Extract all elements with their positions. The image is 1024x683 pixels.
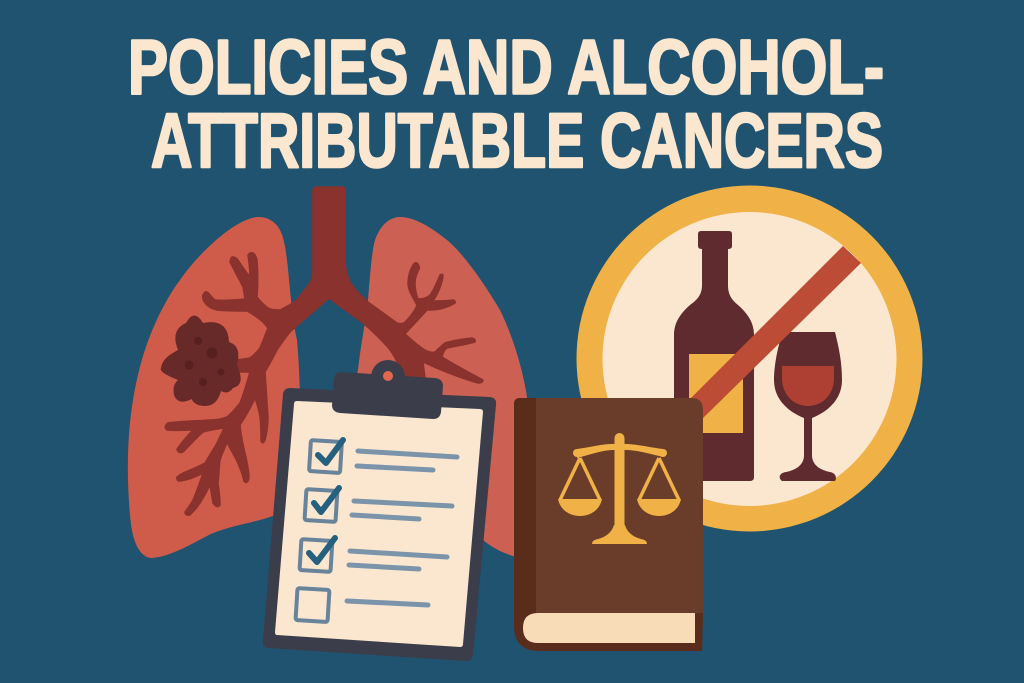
clip	[332, 360, 443, 419]
bronchi	[165, 187, 483, 515]
icon: clipboard checklist	[263, 360, 496, 661]
book cover	[514, 398, 703, 651]
bottle label	[689, 354, 743, 433]
checkbox rows	[296, 440, 342, 622]
icon: lungs	[128, 187, 530, 570]
paper	[275, 401, 483, 647]
icon: law book	[514, 398, 703, 651]
right lung	[340, 217, 530, 570]
clipboard board	[263, 388, 496, 661]
check marks	[309, 440, 343, 562]
icon: scales of justice	[558, 433, 681, 544]
tumor	[161, 316, 241, 406]
wine glass	[774, 332, 842, 481]
book spine	[514, 398, 703, 651]
wine bottle	[674, 231, 754, 481]
sign ring	[576, 186, 922, 532]
icon: no alcohol sign	[576, 186, 922, 532]
left lung	[128, 217, 300, 558]
book pages	[523, 613, 695, 643]
title	[128, 24, 884, 184]
prohibition slash	[680, 246, 861, 424]
text lines	[347, 451, 457, 605]
